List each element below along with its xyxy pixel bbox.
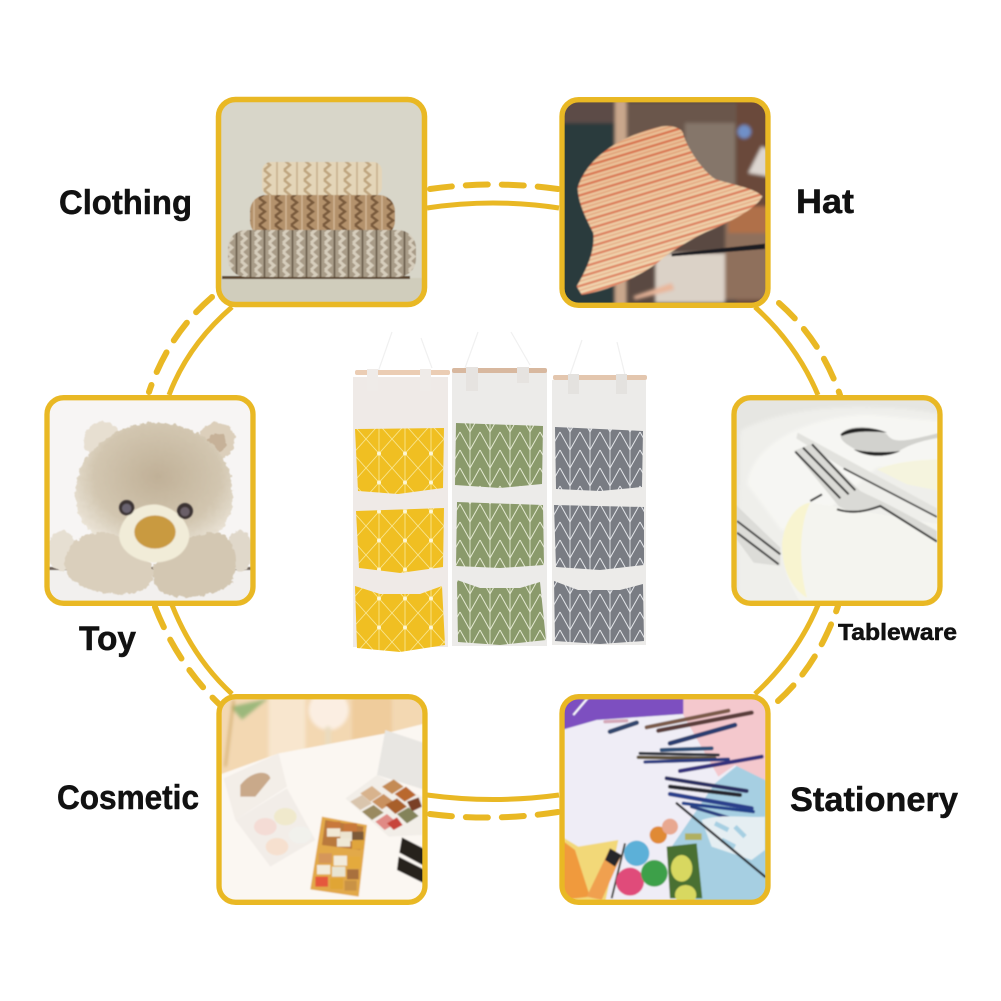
card: clothing: [216, 97, 427, 308]
card: toy: [47, 398, 253, 604]
photo: stacked knit sweaters: [216, 97, 427, 308]
photo: makeup palettes: [219, 690, 425, 903]
yellow organizer: [353, 332, 450, 652]
infographic: [44, 96, 958, 905]
photo: teddy bear: [47, 398, 253, 604]
label: Toy: Toy: [79, 620, 136, 658]
yellow pockets: [355, 428, 445, 652]
photo: pens, paints and paper: [562, 697, 768, 905]
frame: [219, 697, 425, 902]
frame: [734, 398, 940, 603]
connector ring: [149, 184, 840, 818]
label: Clothing: Clothing: [59, 184, 192, 222]
frame: [218, 100, 424, 304]
frame: [562, 697, 768, 902]
card: cosmetic: [219, 690, 425, 903]
green organizer: [452, 332, 547, 646]
photo: plates and cutlery: [734, 398, 940, 604]
grey organizer: [552, 340, 647, 645]
photo: striped straw hat: [562, 100, 768, 306]
green pockets: [455, 423, 546, 645]
frame: [47, 398, 253, 603]
card: hat: [562, 100, 768, 306]
label: Hat: Hat: [796, 183, 854, 221]
card: stationery: [562, 697, 768, 905]
solid ring segments: [169, 203, 818, 800]
frame: [562, 100, 768, 305]
product: hanging organizers: [353, 332, 647, 652]
card: tableware: [734, 398, 940, 604]
dashed ring segments: [149, 184, 840, 818]
label: Stationery: Stationery: [790, 781, 958, 819]
grey pockets: [554, 427, 644, 644]
label: Tableware: Tableware: [838, 619, 957, 645]
label: Cosmetic: Cosmetic: [57, 779, 199, 817]
